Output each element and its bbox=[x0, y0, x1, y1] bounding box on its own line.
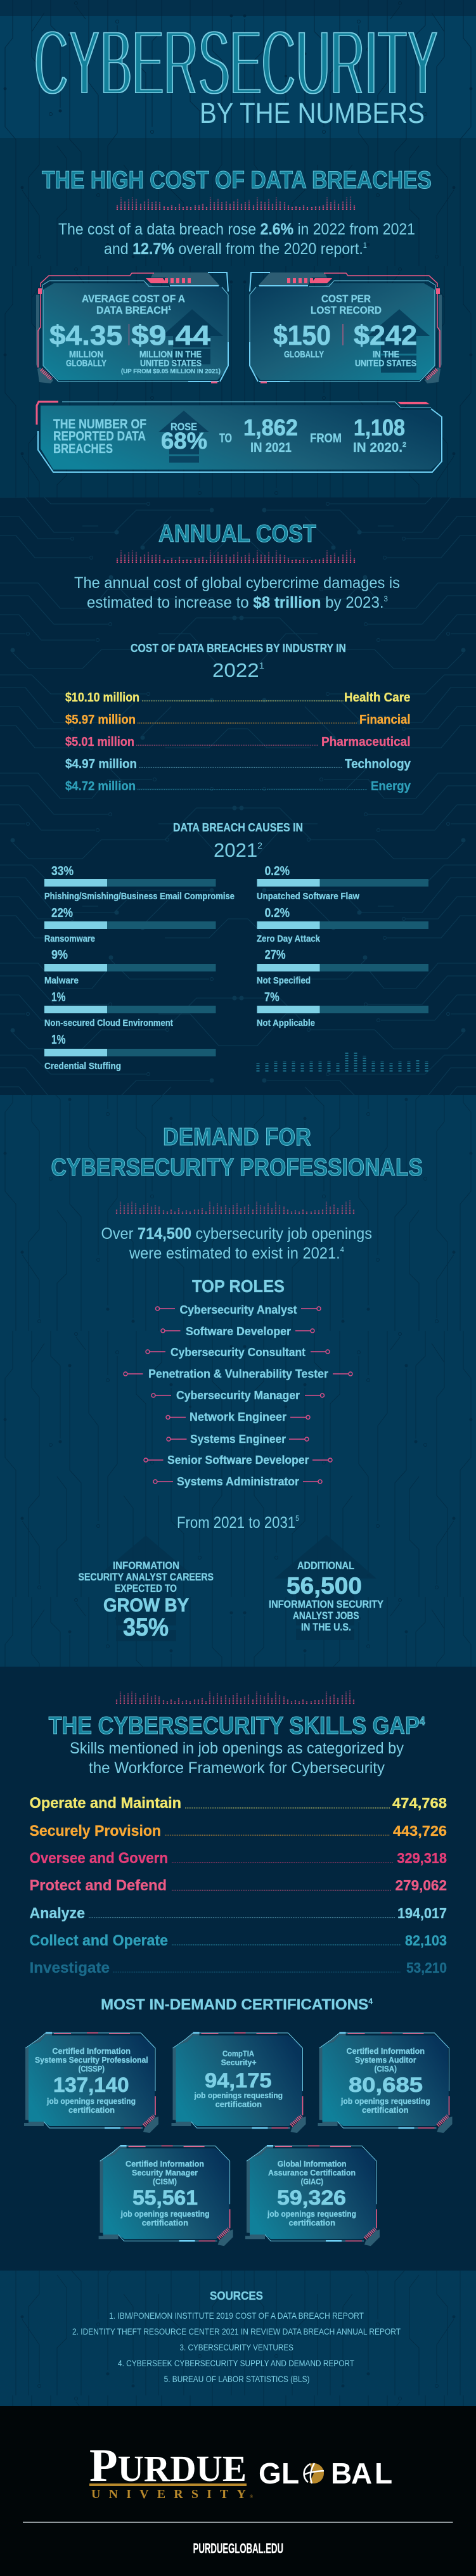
panel: CISM: Security Manager bbox=[132, 2168, 198, 2177]
heading: demand for cybersecurity professionals: DEMAND FOR bbox=[163, 1124, 311, 1151]
chart: data breach causes bars bbox=[44, 864, 428, 1072]
row: financial: $5.97 million bbox=[65, 713, 136, 727]
panel: CompTIA Security+: CompTIA bbox=[222, 2049, 255, 2058]
row: analyze: Analyze bbox=[29, 1905, 85, 1922]
heading: cost by industry: COST OF DATA BREACHES BY INDUSTRY IN bbox=[131, 641, 346, 655]
icon: background up arrow bbox=[95, 1535, 196, 1641]
divider bbox=[23, 2522, 453, 2523]
logo: Purdue Global bbox=[89, 2440, 392, 2501]
row: securely provision: Securely Provision bbox=[29, 1823, 161, 1840]
value: 1,108 in 2020: 1,108 bbox=[354, 414, 405, 440]
row: operate and maintain bbox=[29, 1795, 447, 1812]
role bbox=[167, 1433, 309, 1445]
stat text: SECURITY ANALYST CAREERS bbox=[79, 1571, 214, 1583]
intro text: data breach cost: and 12.7% overall from the 2020 report. bbox=[104, 240, 378, 258]
panel: CISSP: (CISSP) bbox=[79, 2064, 105, 2073]
icon: background up arrow bbox=[158, 411, 209, 463]
bar: malware bbox=[44, 948, 215, 986]
row: protect and defend: Protect and Defend bbox=[29, 1877, 167, 1894]
intro text: data breach cost bbox=[58, 221, 415, 258]
value captions: UNITED STATES bbox=[140, 359, 202, 369]
panel: reported data breaches bbox=[37, 402, 442, 472]
panel: GIAC: Assurance Certification bbox=[268, 2168, 356, 2177]
row: health care bbox=[65, 691, 411, 705]
label: BREACHES bbox=[53, 442, 113, 456]
panel: CISA: certification bbox=[362, 2105, 409, 2115]
role: Systems Engineer bbox=[190, 1433, 286, 1445]
bar: unpatched software: 0.2% bbox=[265, 864, 290, 878]
value: united states: $9.44 bbox=[131, 320, 211, 351]
heading: cost by industry: 1 bbox=[259, 660, 264, 670]
sources list: 1. IBM/PONEMON INSTITUTE 2019 COST OF A DATA BREACH REPORT bbox=[109, 2310, 364, 2321]
role bbox=[166, 1411, 310, 1423]
stat text: INFORMATION SECURITY bbox=[269, 1598, 384, 1610]
sources heading: SOURCES bbox=[210, 2290, 263, 2302]
panel: GIAC: Global Information bbox=[278, 2159, 347, 2169]
text: from 2021 to 2031: From 2021 to 2031 bbox=[177, 1514, 311, 1532]
panel: CISM: Certified Information bbox=[125, 2159, 204, 2169]
row: protect and defend: 279,062 bbox=[396, 1877, 447, 1894]
bar: ransomware bbox=[44, 906, 215, 944]
heading: data breach causes: DATA BREACH CAUSES IN bbox=[173, 821, 303, 834]
panel: CISSP: Certified Information bbox=[52, 2046, 131, 2056]
stat text: EXPECTED TO bbox=[115, 1582, 177, 1594]
row: energy: Energy bbox=[371, 779, 411, 793]
row: health care: $10.10 million bbox=[65, 691, 139, 705]
role: Cybersecurity Analyst bbox=[180, 1304, 297, 1316]
panel: GIAC: job openings requesting bbox=[267, 2209, 356, 2219]
row: energy: $4.72 million bbox=[65, 779, 136, 793]
row: operate and maintain: 474,768 bbox=[392, 1795, 447, 1811]
value: 1,108 in 2020: IN 2020. bbox=[353, 440, 403, 455]
panel: CompTIA Security+: job openings requesting bbox=[194, 2091, 283, 2100]
decorative equalizer bbox=[117, 1690, 354, 1704]
stat text: IN THE U.S. bbox=[301, 1621, 351, 1633]
label bbox=[53, 417, 146, 456]
value captions: GLOBALLY bbox=[66, 359, 106, 369]
panel: GIAC bbox=[245, 2146, 380, 2246]
bar: phishing bbox=[44, 864, 235, 902]
card heading: COST PER bbox=[321, 293, 371, 305]
heading: top roles: TOP ROLES bbox=[192, 1276, 285, 1296]
stat: analyst careers growth bbox=[79, 1535, 214, 1641]
decorative equalizer bbox=[117, 1200, 354, 1214]
row: financial: Financial bbox=[359, 713, 411, 727]
text: from 2021 to 2031: 5 bbox=[295, 1514, 299, 1523]
panel: CompTIA Security+: Security+ bbox=[221, 2058, 257, 2067]
heading: most in-demand certifications: MOST IN-DEMAND CERTIFICATIONS bbox=[101, 1996, 367, 2013]
decorative teal equalizer bbox=[258, 1053, 427, 1072]
bar: malware: 9% bbox=[51, 948, 68, 962]
decorative equalizer bbox=[117, 549, 354, 563]
role bbox=[161, 1325, 314, 1338]
icon: background up arrow bbox=[162, 309, 223, 364]
bar: not specified: 27% bbox=[265, 948, 286, 962]
bar: zero day bbox=[257, 906, 428, 944]
panel: CISA: 80,685 bbox=[349, 2073, 423, 2096]
text: job openings: Over 714,500 cybersecurity job openings bbox=[101, 1225, 372, 1243]
bar: unpatched software bbox=[257, 864, 428, 902]
bar: not applicable bbox=[257, 990, 428, 1028]
panel: CISSP: certification bbox=[68, 2105, 115, 2115]
panel: CISA bbox=[318, 2033, 453, 2133]
list: skills bbox=[29, 1795, 447, 1977]
panel: CISA: (CISA) bbox=[374, 2064, 397, 2073]
row: financial bbox=[65, 713, 411, 727]
list: top roles bbox=[124, 1304, 352, 1488]
bar: cloud: 1% bbox=[51, 990, 66, 1004]
row: protect and defend bbox=[29, 1877, 447, 1894]
role: Software Developer bbox=[186, 1325, 291, 1338]
text: annual cost of cybercrime bbox=[74, 574, 400, 612]
row: collect and operate: 82,103 bbox=[405, 1932, 447, 1949]
stat text: ADDITIONAL bbox=[297, 1560, 354, 1572]
row: pharmaceutical: Pharmaceutical bbox=[321, 735, 411, 749]
row: pharmaceutical bbox=[65, 735, 411, 749]
icon: background up arrow bbox=[368, 309, 430, 373]
logo: Purdue Global: GLOBAL bbox=[259, 2457, 392, 2490]
value captions: UNITED STATES bbox=[355, 359, 416, 369]
sources list: 4. CYBERSEEK CYBERSECURITY SUPPLY AND DEMAND REPORT bbox=[118, 2358, 354, 2368]
value: 1,862 in 2021: 1,862 bbox=[243, 414, 298, 440]
role: Cybersecurity Manager bbox=[176, 1389, 300, 1402]
list: cost by industry bbox=[65, 691, 411, 793]
heading: data breach causes bbox=[173, 821, 303, 861]
value: united states: $242 bbox=[354, 320, 417, 351]
value: rose 68%: 68% bbox=[161, 428, 207, 454]
panel: CISA: job openings requesting bbox=[340, 2096, 430, 2106]
text: skills intro: Skills mentioned in job openings as categorized by bbox=[70, 1740, 404, 1757]
bar: zero day: Zero Day Attack bbox=[257, 934, 321, 944]
text: skills intro bbox=[70, 1740, 404, 1777]
heading: skills gap: THE CYBERSECURITY SKILLS GAP bbox=[49, 1712, 471, 1740]
value captions: MILLION bbox=[69, 350, 103, 360]
row: investigate: 53,210 bbox=[406, 1959, 447, 1976]
bar: phishing: Phishing/Smishing/Business Email Compromise bbox=[44, 892, 235, 902]
panel: GIAC: 59,326 bbox=[277, 2186, 346, 2209]
stat text: ANALYST JOBS bbox=[293, 1610, 359, 1622]
bar: not applicable: 7% bbox=[264, 990, 280, 1004]
role: Network Engineer bbox=[190, 1411, 286, 1423]
panel: cost per lost record: LOST RECORD bbox=[311, 305, 382, 316]
value captions: IN THE bbox=[373, 350, 399, 360]
row: investigate: Investigate bbox=[29, 1959, 110, 1977]
stat text: INFORMATION bbox=[113, 1560, 179, 1572]
intro text: data breach cost: The cost of a data breach rose 2.6% in 2022 from 2021 bbox=[58, 221, 415, 238]
bar: credential stuffing: 1% bbox=[51, 1033, 66, 1047]
panel: CISM: job openings requesting bbox=[120, 2209, 210, 2219]
logo: Purdue Global: PURDUE bbox=[89, 2440, 247, 2492]
bar: not specified: Not Specified bbox=[257, 976, 311, 986]
icon: globe bbox=[302, 2462, 325, 2485]
panel: CompTIA Security+: 94,175 bbox=[205, 2069, 272, 2092]
row: analyze: 194,017 bbox=[397, 1905, 447, 1921]
value captions bbox=[284, 350, 416, 369]
bar: cloud: Non-secured Cloud Environment bbox=[44, 1018, 173, 1028]
row: health care: Health Care bbox=[344, 691, 411, 705]
text: job openings bbox=[101, 1225, 372, 1262]
decorative equalizer bbox=[117, 196, 354, 210]
icon: background up arrow bbox=[274, 1535, 376, 1640]
row: analyze bbox=[29, 1905, 447, 1922]
row: operate and maintain: Operate and Maintain bbox=[29, 1795, 181, 1812]
role: Penetration & Vulnerability Tester bbox=[148, 1368, 328, 1380]
row: securely provision bbox=[29, 1823, 447, 1840]
panel: cost per lost record bbox=[250, 272, 442, 383]
text: annual cost of cybercrime: The annual cost of global cybercrime damages is bbox=[74, 574, 400, 592]
text: skills intro: the Workforce Framework for Cybersecurity bbox=[89, 1759, 385, 1777]
stat text: 35% bbox=[123, 1613, 169, 1641]
row: oversee and govern bbox=[29, 1850, 447, 1867]
value: 1,862 in 2021: IN 2021 bbox=[250, 440, 292, 455]
bar: unpatched software: Unpatched Software Flaw bbox=[257, 892, 360, 902]
value: rose 68%: ROSE bbox=[170, 421, 197, 433]
bar: cloud bbox=[44, 990, 215, 1028]
panel: CISSP bbox=[24, 2033, 158, 2133]
panel: CISA: Certified Information bbox=[346, 2046, 425, 2056]
bar: ransomware: Ransomware bbox=[44, 934, 95, 944]
heading: data breach causes: 2 bbox=[257, 840, 262, 850]
role: Cybersecurity Consultant bbox=[170, 1346, 306, 1359]
heading: demand for cybersecurity professionals bbox=[51, 1124, 423, 1181]
panel: average cost of a data breach: 1 bbox=[168, 305, 171, 311]
heading: cost by industry bbox=[131, 641, 346, 681]
row: pharmaceutical: $5.01 million bbox=[65, 735, 134, 749]
value captions: MILLION IN THE bbox=[139, 350, 202, 360]
panel: CompTIA Security+: certification bbox=[215, 2099, 262, 2109]
bar: phishing: 33% bbox=[51, 864, 74, 878]
title: BY THE NUMBERS bbox=[200, 97, 425, 129]
heading: demand for cybersecurity professionals: CYBERSECURITY PROFESSIONALS bbox=[51, 1154, 423, 1181]
sources list: 3. CYBERSECURITY VENTURES bbox=[180, 2342, 293, 2352]
panel: CISM: (CISM) bbox=[153, 2177, 177, 2186]
panel: CISSP: Systems Security Professional bbox=[35, 2055, 148, 2065]
label: THE NUMBER OF bbox=[53, 417, 146, 432]
bar: not specified bbox=[257, 948, 428, 986]
panel: CISSP: 137,140 bbox=[53, 2073, 129, 2096]
text: job openings: 4 bbox=[340, 1245, 344, 1254]
logo: Purdue Global: UNIVERSITY bbox=[91, 2487, 247, 2501]
stat: additional analyst jobs bbox=[269, 1535, 384, 1640]
bar: ransomware: 22% bbox=[51, 906, 73, 920]
panel: CISM: certification bbox=[142, 2218, 188, 2227]
panel: CISM: 55,561 bbox=[132, 2186, 198, 2209]
row: collect and operate bbox=[29, 1932, 447, 1949]
row: energy bbox=[65, 779, 411, 793]
row: oversee and govern: Oversee and Govern bbox=[29, 1850, 168, 1867]
panel: CISA: Systems Auditor bbox=[355, 2055, 416, 2065]
value captions: (UP FROM $9.05 MILLION IN 2021) bbox=[121, 368, 221, 375]
bar: malware: Malware bbox=[44, 976, 79, 986]
panel: average cost of a data breach bbox=[36, 272, 228, 383]
text: job openings: were estimated to exist in 2021. bbox=[129, 1245, 352, 1262]
bar: not applicable: Not Applicable bbox=[257, 1018, 315, 1028]
row: technology bbox=[65, 757, 411, 771]
value: global: $4.35 bbox=[49, 320, 122, 351]
value: 1,862 in 2021: TO bbox=[219, 432, 232, 445]
label: REPORTED DATA bbox=[53, 429, 146, 444]
panel: CISM bbox=[99, 2146, 233, 2246]
value: global: $150 bbox=[273, 320, 331, 351]
heading: cost by industry: 2022 bbox=[212, 659, 256, 681]
heading: most in-demand certifications: 4 bbox=[368, 1997, 373, 2006]
logo: Purdue Global: ® bbox=[250, 2494, 254, 2499]
value: 1,862 in 2021 bbox=[219, 414, 298, 455]
bar: zero day: 0.2% bbox=[265, 906, 290, 920]
role: Senior Software Developer bbox=[167, 1454, 309, 1466]
stat text bbox=[269, 1560, 384, 1633]
row: collect and operate: Collect and Operate bbox=[29, 1932, 168, 1949]
sources list: 2. IDENTITY THEFT RESOURCE CENTER 2021 IN REVIEW DATA BREACH ANNUAL REPORT bbox=[72, 2326, 401, 2336]
row: oversee and govern: 329,318 bbox=[397, 1850, 447, 1866]
heading: data breach causes: 2021 bbox=[214, 839, 257, 861]
value: 1,108 in 2020 bbox=[310, 414, 406, 455]
sources list bbox=[72, 2310, 401, 2384]
row: securely provision: 443,726 bbox=[393, 1823, 447, 1839]
role: Systems Administrator bbox=[177, 1475, 299, 1488]
stat text bbox=[79, 1560, 214, 1641]
row: technology: Technology bbox=[345, 757, 411, 771]
row: investigate bbox=[29, 1959, 447, 1977]
heading: annual cost: ANNUAL COST bbox=[158, 520, 316, 548]
sources bbox=[72, 2290, 401, 2384]
text: annual cost of cybercrime: 3 bbox=[384, 594, 388, 603]
bar: credential stuffing bbox=[44, 1033, 215, 1072]
panel: GIAC: certification bbox=[289, 2218, 335, 2227]
footer url: PURDUEGLOBAL.EDU bbox=[193, 2541, 283, 2556]
panel: CompTIA Security+ bbox=[171, 2033, 306, 2133]
row: technology: $4.97 million bbox=[65, 757, 137, 771]
text: annual cost of cybercrime: estimated to increase to $8 trillion by 2023. bbox=[87, 594, 386, 612]
card heading: AVERAGE COST OF A bbox=[82, 293, 185, 305]
sources list: 5. BUREAU OF LABOR STATISTICS (BLS) bbox=[164, 2374, 309, 2384]
value: 1,108 in 2020: FROM bbox=[310, 432, 342, 445]
value captions bbox=[66, 350, 221, 375]
intro text: data breach cost: 1 bbox=[363, 241, 367, 250]
value: 1,108 in 2020: 2 bbox=[402, 441, 406, 449]
panel: GIAC: (GIAC) bbox=[301, 2177, 323, 2186]
stat text: 56,500 bbox=[286, 1573, 362, 1599]
bar: credential stuffing: Credential Stuffing bbox=[44, 1061, 121, 1072]
stat text: GROW BY bbox=[103, 1595, 189, 1616]
value captions: GLOBALLY bbox=[284, 350, 324, 360]
panel: average cost of a data breach: DATA BREACH bbox=[96, 305, 171, 316]
heading: skills gap: 4 bbox=[420, 1715, 425, 1727]
panel: CISSP: job openings requesting bbox=[46, 2096, 136, 2106]
